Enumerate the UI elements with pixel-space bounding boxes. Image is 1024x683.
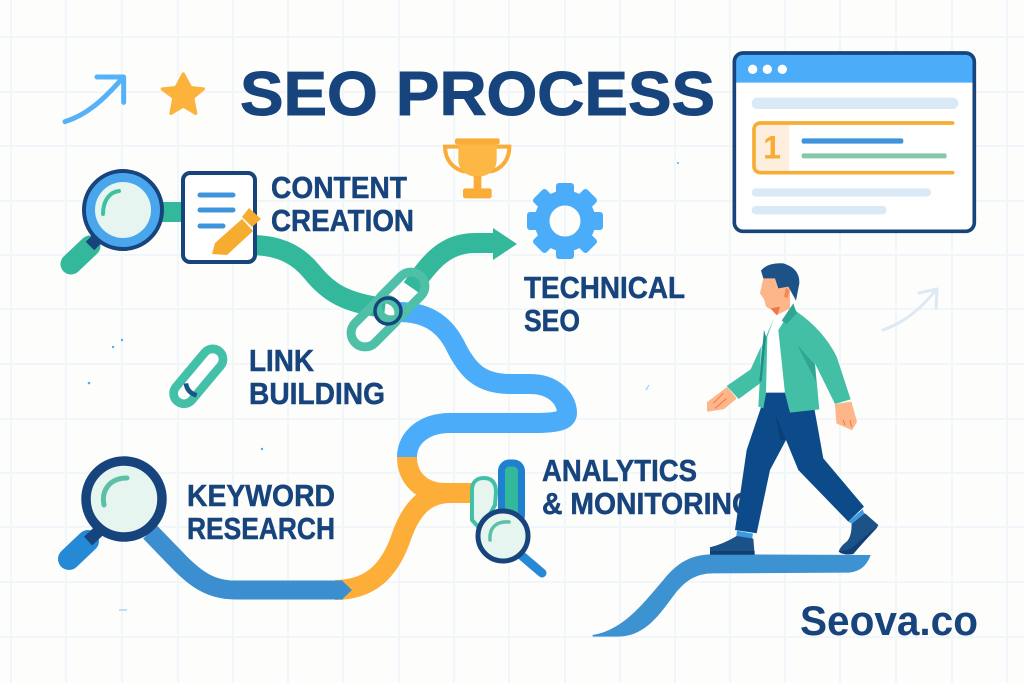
title: SEO PROCESS — [240, 60, 715, 129]
path: blue segment — [398, 312, 567, 457]
faint arrow — [883, 289, 937, 330]
path: lower blue segment — [150, 532, 352, 600]
label: content creation: CONTENT — [271, 170, 407, 205]
icon: paperclip — [169, 345, 227, 408]
icon: keyword magnifier — [69, 461, 162, 559]
label: analytics and monitoring: & MONITORING — [542, 486, 754, 521]
icon: star — [162, 74, 203, 113]
icon: top magnifier — [71, 171, 162, 264]
platform — [593, 554, 871, 637]
label: keyword research — [187, 478, 335, 546]
label: technical seo — [524, 270, 685, 338]
icon: analytics bars and magnifier — [472, 463, 542, 573]
icon: rising arrow — [65, 77, 124, 122]
icon: chain link — [345, 266, 431, 353]
path: orange segment — [335, 457, 474, 590]
path: green segment to arrow — [160, 212, 517, 308]
label: keyword research: KEYWORD — [187, 478, 335, 513]
icon: document with pencil — [183, 173, 261, 262]
icon: gear — [527, 183, 603, 259]
browser results window — [734, 53, 974, 231]
label: link building: BUILDING — [249, 376, 385, 411]
label: analytics and monitoring: ANALYTICS — [542, 453, 697, 488]
label: link building — [249, 343, 385, 411]
label: technical seo: TECHNICAL — [524, 270, 685, 305]
label: content creation — [271, 170, 414, 238]
label: link building: LINK — [249, 343, 315, 378]
icon: trophy — [445, 138, 509, 198]
brand: Seova.co: Seova.co — [800, 597, 978, 644]
person walking — [708, 263, 878, 555]
label: keyword research: RESEARCH — [187, 511, 335, 546]
label: technical seo: SEO — [524, 303, 580, 338]
browser results window: 1 — [763, 129, 781, 165]
label: content creation: CREATION — [271, 203, 414, 238]
label: analytics and monitoring — [542, 453, 754, 521]
